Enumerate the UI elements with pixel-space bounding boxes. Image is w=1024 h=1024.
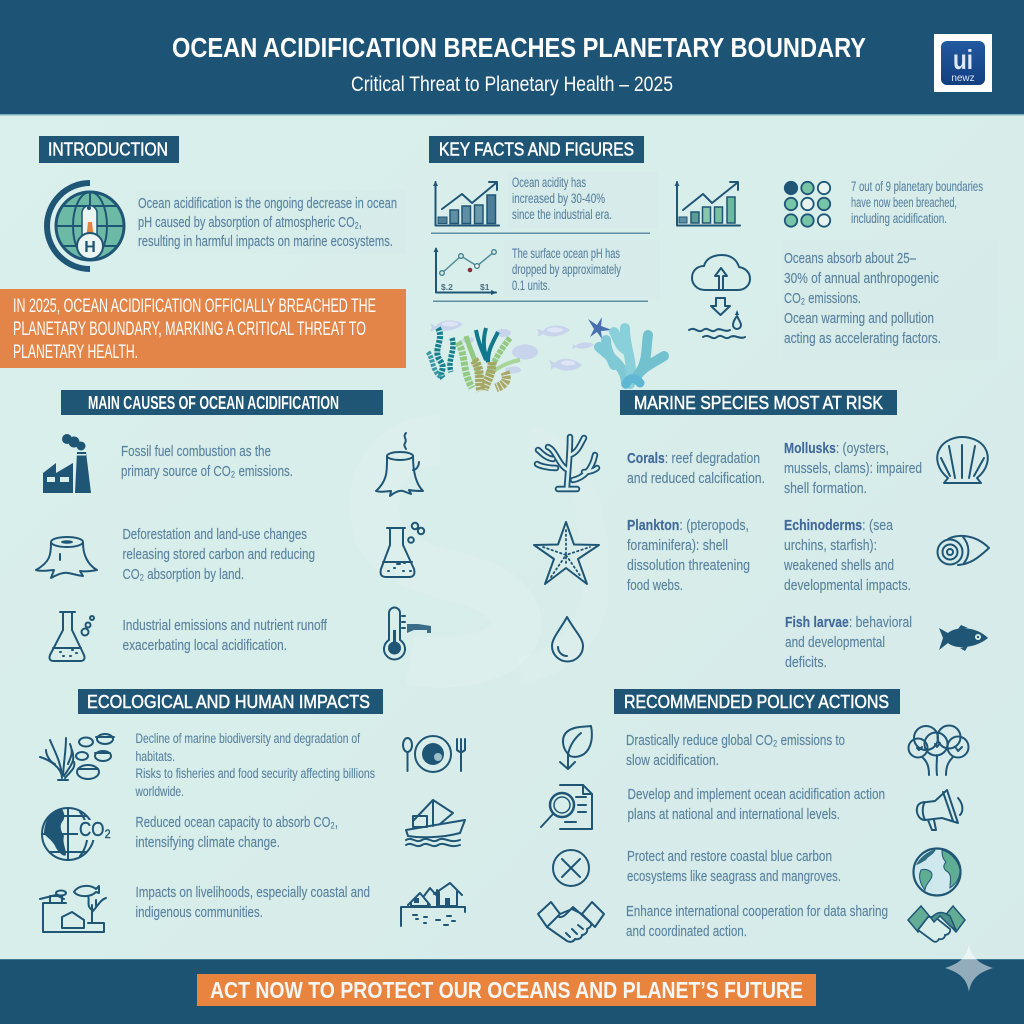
text: cooperation (626, 903, 888, 940)
icon: leaf with arrow (560, 726, 592, 769)
text: echinoderms (783, 517, 911, 594)
text: biodiversity and fisheries: worldwide. (135, 784, 184, 799)
icon: sparkle (945, 944, 993, 992)
panel: ecological and human impacts (40, 689, 465, 932)
heading: introduction: INTRODUCTION (48, 140, 168, 160)
text: fish larvae: Fish larvae: behavioral (785, 614, 912, 631)
chart: pH decline: $.2 (441, 282, 453, 292)
text: reduce emissions: slow acidification. (626, 752, 719, 769)
text: biodiversity and fisheries: Decline of marine biodiversity and degradation of (136, 731, 360, 746)
text: livelihoods: Impacts on livelihoods, especially coastal and (136, 884, 370, 901)
text: introduction: pH caused by absorption of atmospheric CO₂, (138, 214, 362, 231)
heading: key facts (429, 136, 644, 163)
icon: nine planetary boundary dots (785, 182, 830, 227)
callout: 2025 breach: PLANETARY BOUNDARY, MARKING A CRITICAL THREAT TO (13, 319, 366, 340)
text: reduce emissions (626, 732, 845, 769)
text: action plans (628, 786, 885, 823)
text: biodiversity and fisheries: habitats. (136, 749, 175, 764)
header band (0, 0, 1024, 116)
text: ocean capacity: Reduced ocean capacity to absorb CO₂, (136, 814, 338, 831)
title: OCEAN ACIDIFICATION BREACHES PLANETARY BOUNDARY (172, 32, 866, 63)
text: fossil fuels: primary source of CO₂ emissions. (121, 463, 293, 480)
text: mollusks: Mollusks: (oysters, (784, 440, 889, 457)
icon: flask (50, 612, 94, 661)
callout: 2025 breach: IN 2025, OCEAN ACIDIFICATION OFFICIALLY BREACHED THE (13, 296, 376, 317)
text: livelihoods: indigenous communities. (136, 904, 263, 921)
text: fossil fuels: Fossil fuel combustion as the (121, 443, 271, 460)
text: introduction (135, 190, 405, 254)
panel: main causes (36, 390, 431, 661)
icon: globe with CO2: CO₂ (79, 819, 111, 841)
text: fossil fuels (121, 443, 293, 480)
panel: marine species at risk (534, 390, 989, 671)
icon: starfish (534, 522, 599, 584)
logo: newz (951, 73, 975, 84)
icon: plate and cutlery (403, 736, 465, 772)
text: industrial emissions: exacerbating local acidification. (122, 637, 287, 654)
icon: thermometer and tap (384, 608, 431, 659)
text: blue carbon: ecosystems like seagrass and mangroves. (627, 868, 841, 885)
icon: factory (43, 434, 91, 493)
icon: globe with thermometer (47, 183, 124, 269)
icon: document and magnifier (541, 785, 592, 829)
heading: key facts: KEY FACTS AND FIGURES (439, 140, 634, 160)
text: corals (627, 450, 765, 487)
heading: main causes (61, 390, 383, 415)
text: plankton: food webs. (627, 577, 683, 594)
text: oceans absorb: CO₂ emissions. (784, 290, 861, 307)
icon: spiral shell (938, 536, 989, 565)
icon: tree stump (36, 537, 97, 578)
text: cooperation: Enhance international cooperation for data sharing (626, 903, 888, 920)
text: echinoderms: weakened shells and (783, 557, 894, 574)
logo: ui (953, 44, 973, 75)
text: plankton: Plankton: (pteropods, (627, 517, 749, 534)
icon: megaphone (917, 790, 962, 830)
text: pH fact: dropped by approximately (512, 262, 621, 277)
icon: scallop shell (937, 437, 988, 483)
text: mollusks: shell formation. (784, 480, 867, 497)
footer band (0, 944, 1024, 1024)
text: echinoderms: developmental impacts. (784, 577, 911, 594)
chart: pH decline: $1 (480, 282, 490, 292)
text: oceans absorb: acting as accelerating factors. (784, 330, 941, 347)
text: corals: and reduced calcification. (627, 470, 765, 487)
text: oceans absorb (783, 240, 998, 360)
text: deforestation: releasing stored carbon and reducing (122, 546, 315, 563)
logo (934, 34, 992, 92)
text: oceans absorb: Oceans absorb about 25– (784, 250, 917, 267)
icon: tree stump with smoke (376, 433, 423, 496)
callout: 2025 breach: PLANETARY HEALTH. (13, 342, 138, 363)
text: boundaries fact: including acidification. (851, 211, 947, 226)
text: ocean capacity: intensifying climate change. (136, 834, 280, 851)
icon: trees (908, 726, 968, 775)
icon: handshake outline (538, 902, 604, 942)
text: fish larvae (785, 614, 912, 671)
heading: policy actions: RECOMMENDED POLICY ACTIONS (624, 692, 889, 712)
text: biodiversity and fisheries (135, 731, 375, 799)
icon: flooded houses (401, 883, 465, 926)
text: ocean capacity (136, 814, 338, 851)
text: oceans absorb: Ocean warming and pollution (784, 310, 934, 327)
icon: water drop (552, 617, 583, 662)
text: acidity fact: Ocean acidity has (512, 175, 586, 190)
icon: handshake coloured (908, 906, 965, 942)
text: blue carbon (627, 848, 841, 885)
icon: coastal community (40, 886, 106, 932)
text: reduce emissions: Drastically reduce global CO₂ emissions to (626, 732, 845, 749)
text: deforestation: CO₂ absorption by land. (122, 566, 244, 583)
heading: introduction (39, 136, 179, 163)
text: cooperation: and coordinated action. (626, 923, 747, 940)
text: deforestation: Deforestation and land-use changes (122, 526, 307, 543)
icon: globe with CO2 (42, 808, 112, 860)
text: pH fact: The surface ocean pH has (512, 246, 620, 261)
text: acidity fact: since the industrial era. (512, 207, 612, 222)
text: acidity fact: increased by 30-40% (512, 191, 605, 206)
text: plankton (627, 517, 750, 594)
text: fish larvae: and developmental (785, 634, 885, 651)
icon: coral (537, 437, 597, 489)
text: livelihoods (136, 884, 370, 921)
icon: circle with cross (553, 850, 589, 886)
panel: key facts and figures (428, 136, 998, 391)
icon: coral and fish (40, 734, 114, 780)
text: blue carbon: Protect and restore coastal blue carbon (627, 848, 832, 865)
text: pH fact (512, 246, 621, 293)
icon: globe with thermometer: H (84, 239, 96, 256)
heading: marine species: MARINE SPECIES MOST AT RISK (634, 393, 883, 413)
text: action plans: Develop and implement ocean acidification action (628, 786, 885, 803)
subtitle: Critical Threat to Planetary Health – 2025 (351, 72, 673, 96)
text: industrial emissions (122, 617, 328, 654)
text: boundaries fact (851, 179, 983, 226)
text: acidity fact (512, 175, 612, 222)
illustration: fish, seaweed and coral (428, 317, 664, 391)
heading: main causes: MAIN CAUSES OF OCEAN ACIDIFICATION (88, 393, 339, 413)
chart: acidity increase (433, 181, 499, 226)
text: industrial emissions: Industrial emissions and nutrient runoff (122, 617, 328, 634)
text: fish larvae: deficits. (785, 654, 827, 671)
text: biodiversity and fisheries: Risks to fisheries and food security affecting billions (136, 766, 375, 781)
text: mollusks (784, 440, 922, 497)
text: echinoderms: urchins, starfish): (784, 537, 877, 554)
call to action: ACT NOW TO PROTECT OUR OCEANS AND PLANET’S FUTURE (210, 977, 803, 1003)
text: introduction: resulting in harmful impacts on marine ecosystems. (138, 233, 393, 250)
text: plankton: dissolution threatening (627, 557, 750, 574)
text: oceans absorb: 30% of annual anthropogenic (784, 270, 939, 287)
icon: earth (914, 848, 960, 896)
panel: introduction (0, 136, 406, 368)
chart: pH decline (434, 247, 497, 295)
text: echinoderms: Echinoderms: (sea (784, 517, 894, 534)
heading: impacts: ECOLOGICAL AND HUMAN IMPACTS (87, 692, 370, 712)
text: mollusks: mussels, clams): impaired (784, 460, 922, 477)
text: introduction: Ocean acidification is the ongoing decrease in ocean (138, 195, 397, 212)
text: deforestation (122, 526, 315, 583)
icon: cloud and ocean absorption (689, 255, 750, 338)
panel: recommended policy actions (538, 689, 968, 942)
text: corals: Corals: reef degradation (627, 450, 760, 467)
icon: fishing boat (406, 800, 465, 846)
icon: flask with bubbles (381, 523, 424, 577)
text: action plans: plans at national and international levels. (628, 806, 840, 823)
chart: green growth bars (674, 181, 740, 226)
callout: 2025 breach (0, 289, 406, 368)
icon: fish (939, 625, 988, 651)
text: boundaries fact: have now been breached, (851, 195, 957, 210)
text: pH fact: 0.1 units. (512, 278, 550, 293)
text: plankton: foraminifera): shell (627, 537, 728, 554)
